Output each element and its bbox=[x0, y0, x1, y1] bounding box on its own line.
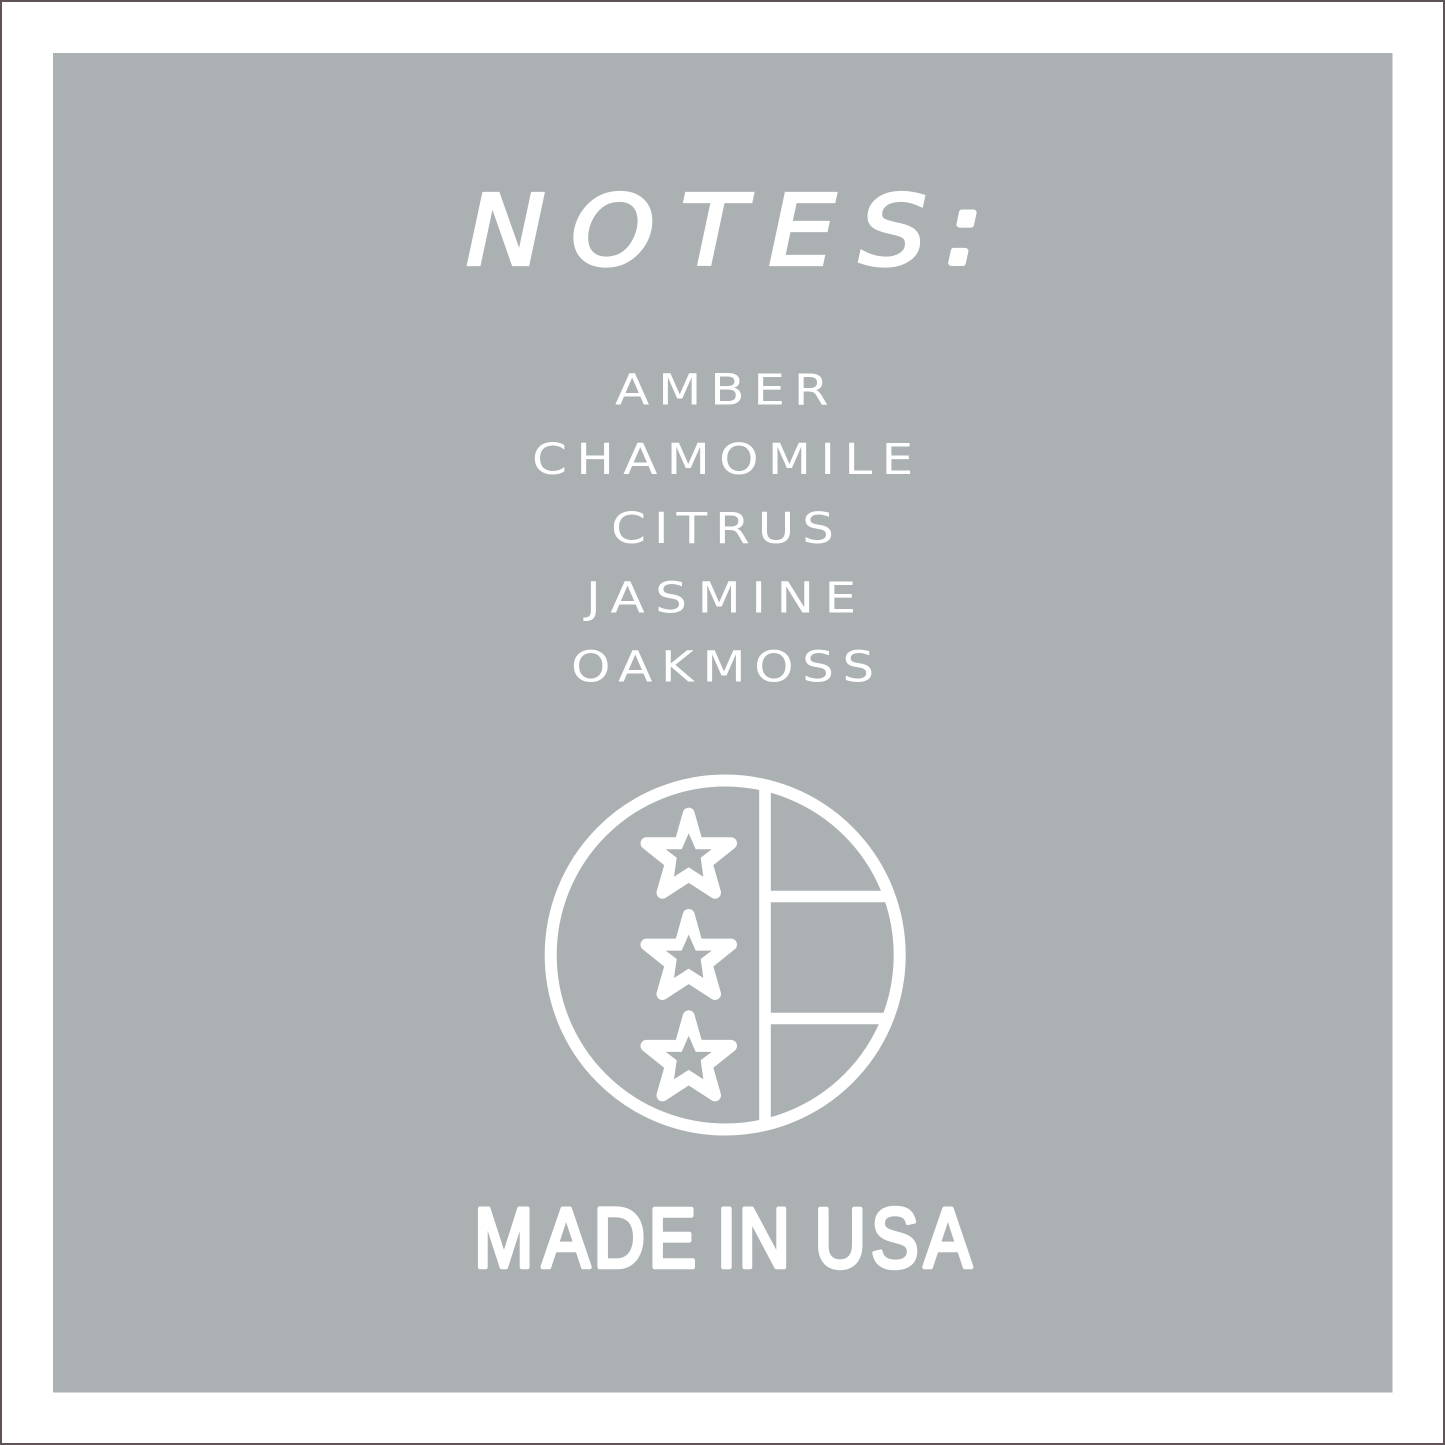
text block: notes list bbox=[532, 365, 913, 692]
heading: notes: NOTES bbox=[466, 175, 927, 288]
text block: notes list: JASMINE bbox=[583, 573, 856, 623]
text block: notes list: AMBER bbox=[615, 365, 829, 414]
text block: notes list: OAKMOSS bbox=[571, 642, 874, 692]
text block: notes list: CITRUS bbox=[611, 504, 834, 553]
text: made in usa: MADE IN USA bbox=[474, 1190, 972, 1285]
icon: star 2 bbox=[646, 915, 731, 994]
icon: american flag circle bbox=[551, 770, 910, 1140]
icon: star 3 bbox=[646, 1016, 731, 1095]
text block: notes list: CHAMOMILE bbox=[532, 435, 913, 484]
icon: star 1 bbox=[646, 814, 731, 893]
heading: notes: : bbox=[946, 174, 982, 287]
